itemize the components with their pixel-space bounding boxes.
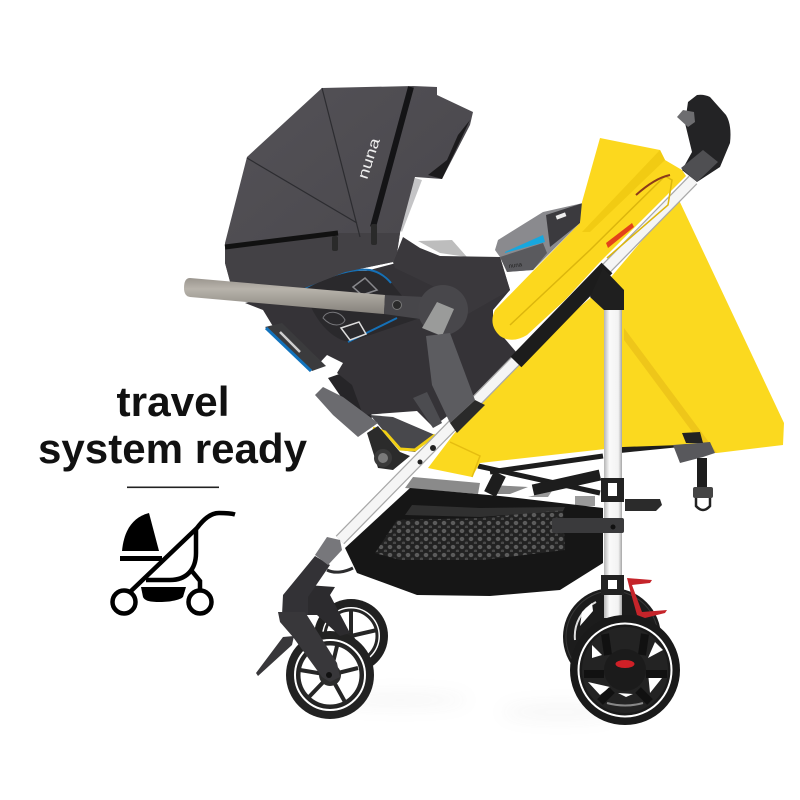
rear tube bracket bbox=[590, 268, 624, 310]
label illustrations bbox=[341, 322, 366, 340]
under-seat grey mesh floor bbox=[405, 477, 595, 506]
wheel logo badge bbox=[616, 660, 634, 668]
front main wheel bbox=[286, 631, 374, 719]
under-seat frame bars bbox=[478, 442, 700, 494]
heading: travel system ready bbox=[38, 378, 308, 472]
seat rear clip and strap bbox=[673, 432, 715, 510]
folded yellow hood bbox=[492, 138, 686, 340]
car seat rear head section bbox=[495, 203, 583, 272]
red brake lever bbox=[627, 578, 667, 618]
storage basket bbox=[345, 488, 603, 596]
main diagonal tube bbox=[340, 180, 693, 540]
handle pivot bbox=[418, 285, 468, 335]
rear wheel, back bbox=[563, 588, 661, 686]
rear main wheel bbox=[570, 615, 680, 725]
wheel windows bbox=[588, 642, 663, 697]
front wheel, back bbox=[314, 599, 388, 673]
blue trim on base bbox=[265, 323, 326, 371]
label panel bbox=[305, 271, 420, 342]
car seat inner padding bbox=[398, 178, 467, 257]
black tube sleeve bbox=[516, 268, 607, 362]
rear vertical tube bbox=[601, 310, 624, 618]
red hood tab bbox=[606, 223, 634, 248]
footrest bar and pedal bbox=[552, 499, 662, 533]
tray cover band bbox=[315, 387, 378, 437]
car seat grey strap bbox=[413, 333, 485, 433]
canopy zippers bbox=[225, 233, 338, 247]
car seat shell bbox=[393, 237, 510, 314]
car seat carry handle bbox=[184, 278, 468, 336]
basket mesh bbox=[375, 510, 565, 560]
canopy logo: nuna bbox=[355, 135, 384, 181]
ground shadow bbox=[330, 692, 620, 721]
seat-carrier body bbox=[245, 257, 517, 427]
car seat tray and knob bbox=[367, 415, 435, 470]
stroller handle grip bbox=[677, 95, 730, 182]
yellow seat fabric: rear panel and lower seat bbox=[428, 198, 784, 477]
car seat strap behind tray bbox=[328, 372, 372, 420]
heading: travel system ready: travel bbox=[116, 378, 230, 425]
icon: stroller with car seat bbox=[112, 513, 235, 614]
car seat rear head section: nuna bbox=[508, 262, 523, 270]
car seat canopy bbox=[225, 86, 473, 302]
front fork and lever bbox=[256, 537, 353, 682]
heading: travel system ready: system ready bbox=[38, 425, 308, 472]
canopy visor edge bbox=[428, 120, 470, 179]
